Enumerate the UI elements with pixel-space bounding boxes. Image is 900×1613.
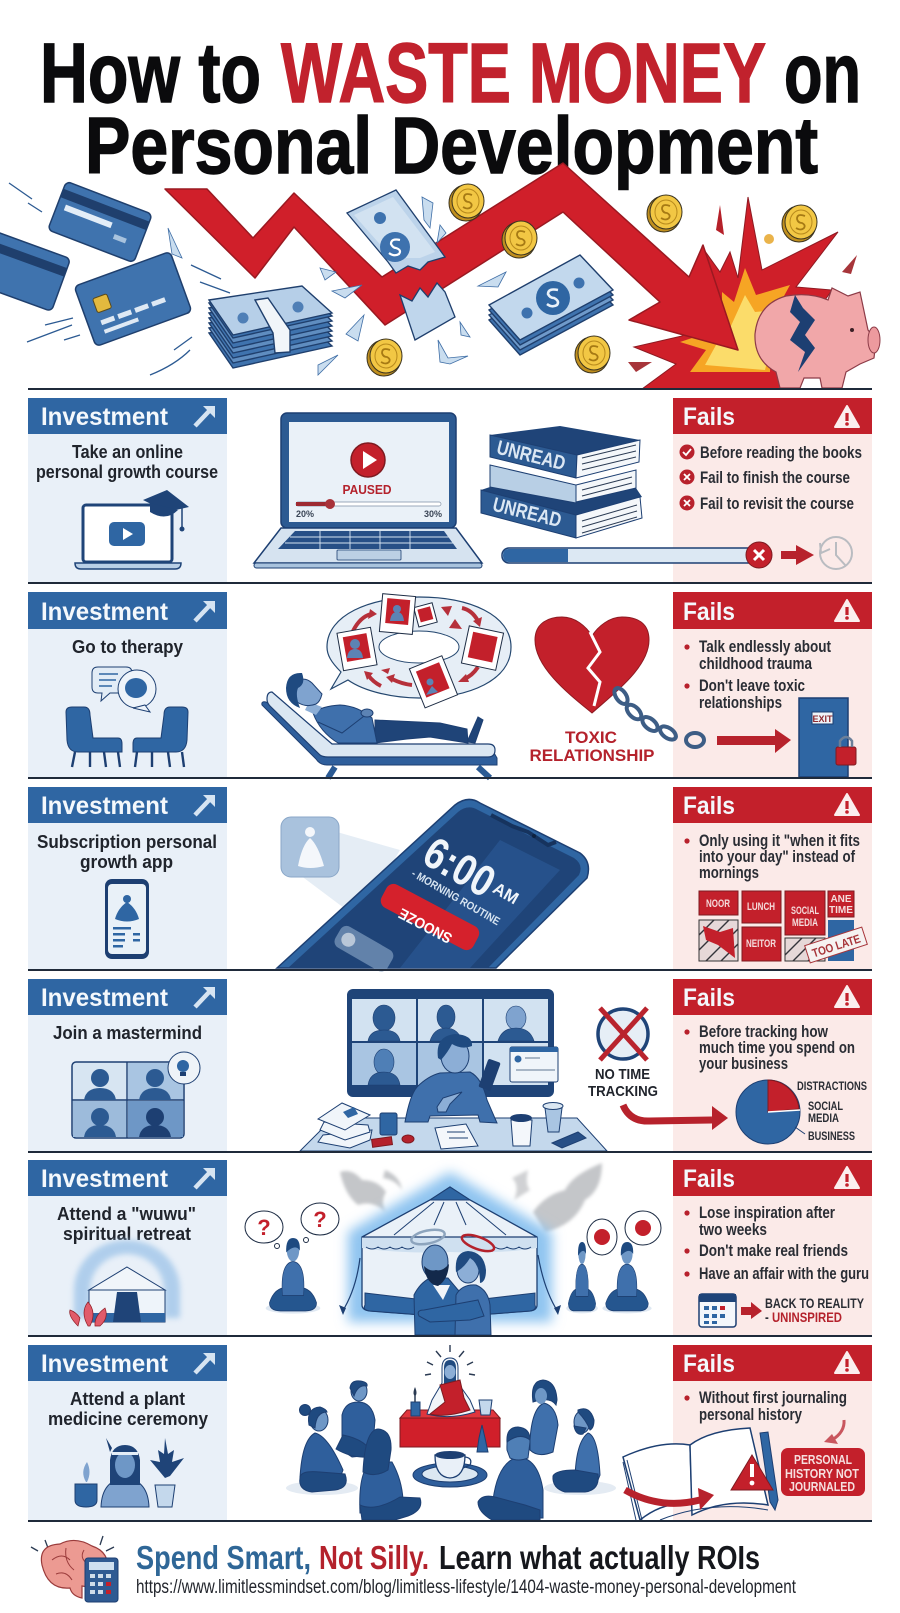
back to reality note: BACK TO REALITY: [765, 1295, 865, 1311]
icon: locked exit door: EXIT: [812, 714, 833, 724]
illustration: paused laptop: PAUSED: [342, 482, 392, 497]
title: WASTE MONEY: [281, 26, 766, 120]
fails header: [673, 1160, 872, 1196]
tagline: [136, 1539, 760, 1576]
left meditating person with question bubbles: [245, 1203, 339, 1314]
icon: video call grid: [72, 1052, 200, 1138]
person: bearded man right: [553, 1409, 600, 1492]
investment header: Investment: [41, 403, 169, 431]
schedule grid: NEITOR: [746, 938, 776, 950]
investment text: [37, 832, 217, 872]
illustration: thought bubble with memories: [327, 594, 511, 708]
investment header: Investment: [41, 984, 169, 1012]
fails list: into your day" instead of: [699, 848, 855, 866]
pie chart: MEDIA: [808, 1111, 839, 1125]
illustration: participants in a circle: [286, 1380, 616, 1520]
fails list: mornings: [699, 864, 759, 882]
fails list: relationships: [699, 694, 782, 712]
callout: personal history not journaled: PERSONAL: [794, 1453, 852, 1467]
icon: coins: [367, 184, 817, 376]
icon: piggy bank: [755, 288, 880, 388]
smoke: [340, 1163, 602, 1232]
person: woman facing away: [360, 1429, 421, 1520]
banner illustration: money crash: [0, 163, 880, 389]
pie chart: BUSINESS: [808, 1129, 855, 1143]
illustration: phone alarm: AM: [490, 879, 522, 908]
illustration: unread books: UNREAD: [494, 437, 568, 475]
row 1: online course: [28, 398, 872, 569]
title: on: [784, 26, 861, 120]
illustration: person on therapy couch: [262, 673, 497, 778]
investment header: Investment: [41, 792, 169, 820]
investment header: [28, 592, 227, 629]
illustration: phone alarm: - MORNING ROUTINE: [409, 868, 502, 928]
fails header: Fails: [683, 1350, 735, 1378]
illustration: unread books: [481, 426, 642, 538]
investment header: [28, 1345, 227, 1381]
investment header: [28, 787, 227, 823]
progress bar with failure: [502, 537, 852, 569]
pie chart: SOCIAL: [808, 1099, 843, 1113]
illustration: shaman on altar: [400, 1345, 500, 1452]
fails list: Fail to finish the course: [700, 469, 850, 487]
icon: cup on saucer: [413, 1451, 487, 1487]
fails header: [673, 979, 872, 1015]
title: [40, 26, 861, 190]
left meditating person with question bubbles: ?: [313, 1207, 327, 1232]
arrow: falling red chart: [165, 163, 738, 350]
row 6: plant medicine: [28, 1345, 872, 1520]
title: How to: [40, 26, 261, 120]
fails list: Before reading the books: [700, 444, 862, 462]
schedule grid: TOO LATE: [810, 932, 862, 960]
fails header: [673, 592, 872, 629]
investment text: medicine ceremony: [48, 1409, 208, 1429]
illustration: broken heart and chain: TOXIC: [565, 728, 617, 747]
fails list: Without first journaling: [699, 1389, 847, 1407]
investment text: Go to therapy: [72, 637, 183, 657]
investment text: Attend a "wuwu": [57, 1204, 196, 1224]
fails list: Fail to revisit the course: [700, 495, 854, 513]
fails header: Fails: [683, 792, 735, 820]
row 3: subscription app: [28, 787, 872, 974]
investment text: [48, 1389, 208, 1429]
illustration: paused laptop: [254, 413, 482, 568]
icon: brain and calculator: [31, 1536, 118, 1602]
investment text: personal growth course: [36, 462, 218, 482]
footer: [31, 1536, 797, 1602]
icon: no time tracking clock: NO TIME: [595, 1066, 650, 1083]
icon: open blank journal: [623, 1428, 778, 1520]
fails list: Lose inspiration after: [699, 1204, 835, 1222]
fails list: Talk endlessly about: [699, 638, 831, 656]
investment text: Attend a plant: [70, 1389, 185, 1409]
icon: glowing yurt with lotus: [70, 1240, 180, 1326]
row 4: mastermind: [28, 979, 872, 1151]
fails list: [684, 1204, 869, 1283]
fails list: much time you spend on: [699, 1039, 855, 1057]
icon: chairs and speech bubbles: [66, 667, 188, 767]
fails list: [680, 444, 862, 513]
illustration: glowing yurt with guru couple: [339, 1172, 561, 1335]
person: woman with bun: [300, 1404, 346, 1492]
person: man facing away: [478, 1427, 543, 1520]
icon: laptop with graduation cap: [75, 490, 189, 569]
left meditating person with question bubbles: ?: [257, 1215, 271, 1240]
schedule grid: SOCIAL: [791, 905, 819, 917]
icon: no time tracking clock: TRACKING: [588, 1083, 658, 1100]
icon: torn bills: [168, 190, 506, 375]
fails list: Don't leave toxic: [699, 677, 805, 695]
back to reality note: [699, 1294, 865, 1327]
arrow to exit: [717, 729, 791, 753]
schedule grid: ANE: [830, 894, 852, 905]
investment text: Take an online: [72, 442, 183, 462]
right seated people with thought bubbles: [566, 1211, 661, 1313]
fails list: Don't make real friends: [699, 1242, 848, 1260]
illustration: video meeting and person: [300, 989, 607, 1151]
fails header: Fails: [683, 598, 735, 626]
person: woman top right: [530, 1380, 558, 1455]
callout: personal history not journaled: JOURNALED: [789, 1480, 855, 1494]
investment text: [36, 442, 218, 482]
fails list: two weeks: [699, 1221, 767, 1239]
fails header: Fails: [683, 403, 735, 431]
icon: explosion: [628, 197, 857, 389]
fails header: [673, 787, 872, 823]
fails list: your business: [699, 1055, 788, 1073]
fails header: [673, 398, 872, 434]
icon: credit cards: [0, 181, 230, 375]
fails list: [684, 638, 831, 712]
illustration: unread books: UNREAD: [490, 494, 564, 532]
icon: money stack right: [489, 255, 613, 355]
investment text: growth app: [80, 852, 173, 872]
fails list: personal history: [699, 1406, 803, 1424]
fails list: [684, 1023, 855, 1073]
fails header: [673, 1345, 872, 1381]
investment header: [28, 398, 227, 434]
pie chart: [736, 1079, 867, 1144]
back to reality note: - UNINSPIRED: [765, 1309, 842, 1325]
tagline: Not Silly.: [319, 1539, 429, 1576]
fails header: Fails: [683, 984, 735, 1012]
callout: personal history not journaled: [781, 1420, 865, 1496]
schedule grid: MEDIA: [792, 917, 818, 929]
arrow to pie chart: [623, 1105, 728, 1130]
illustration: phone alarm: [277, 799, 588, 974]
illustration: broken heart and chain: [530, 617, 704, 765]
fails list: [684, 832, 860, 882]
icon: no time tracking clock: [588, 1008, 658, 1100]
investment text: Join a mastermind: [53, 1023, 202, 1043]
investment text: spiritual retreat: [63, 1224, 191, 1244]
investment header: [28, 1160, 227, 1196]
icon: money stack: [209, 286, 332, 368]
investment header: Investment: [41, 598, 169, 626]
fails list: Only using it "when it fits: [699, 832, 860, 850]
investment text: [57, 1204, 196, 1244]
tagline: Learn what actually ROIs: [439, 1539, 760, 1576]
icon: ceremony woman, cup and leaf: [75, 1438, 184, 1507]
illustration: phone alarm: SNOOZE: [396, 904, 455, 947]
schedule grid: NOOR: [706, 898, 730, 910]
icon: locked exit door: [799, 698, 856, 777]
icon: phone with meditating figure: [105, 879, 149, 959]
fails list: childhood trauma: [699, 655, 813, 673]
illustration: broken heart and chain: RELATIONSHIP: [530, 746, 654, 765]
investment text: Subscription personal: [37, 832, 217, 852]
investment header: Investment: [41, 1350, 169, 1378]
schedule grid: LUNCH: [747, 901, 775, 913]
row 5: spiritual retreat: [28, 1160, 872, 1335]
illustration: paused laptop: 20%: [296, 509, 314, 519]
pie chart: DISTRACTIONS: [797, 1079, 867, 1093]
fails list: [684, 1389, 847, 1424]
icon: meditation app tile: [281, 817, 400, 920]
person: kneeling man top left: [336, 1381, 375, 1457]
investment header: [28, 979, 227, 1015]
tagline: Spend Smart,: [136, 1539, 311, 1576]
illustration: phone alarm: 6:00: [415, 828, 504, 907]
row panels: [28, 434, 872, 1520]
investment header: Investment: [41, 1165, 169, 1193]
fails list: Before tracking how: [699, 1023, 828, 1041]
schedule grid: TIME: [829, 905, 853, 916]
callout: personal history not journaled: HISTORY NOT: [785, 1467, 859, 1481]
fails header: Fails: [683, 1165, 735, 1193]
illustration: paused laptop: 30%: [424, 509, 442, 519]
row 2: therapy: [28, 592, 872, 778]
schedule grid: [699, 891, 867, 963]
